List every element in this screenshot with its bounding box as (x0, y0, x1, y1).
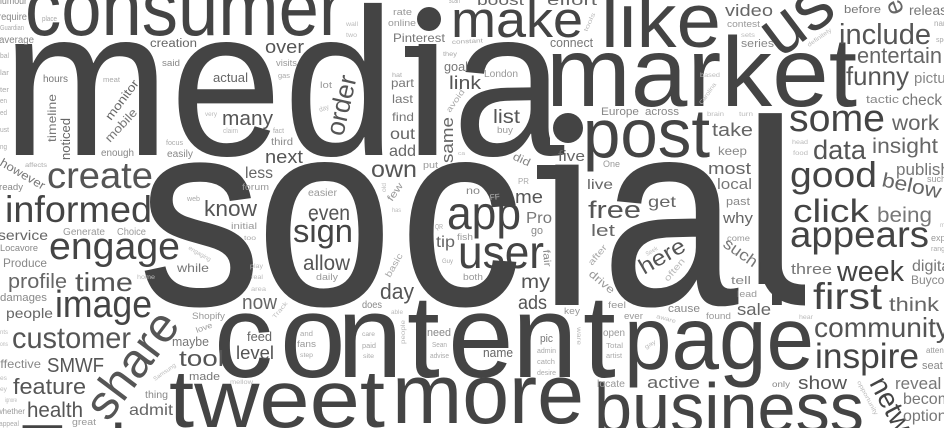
small words: left side: gas (278, 73, 291, 80)
small words: left side: over (265, 37, 304, 57)
words: right side: get (648, 194, 677, 211)
words: right side: click (793, 193, 870, 229)
small words: left side: monitor (102, 77, 142, 123)
words: centre: list (493, 107, 521, 128)
words: centre: few (385, 180, 407, 204)
words: centre: ever (624, 311, 643, 321)
words: right side: video (725, 1, 773, 20)
words: centre: ware (575, 326, 581, 346)
words: right side: reveal (895, 374, 941, 393)
words: centre: Pinterest (393, 31, 446, 45)
words: right side: data (813, 135, 867, 165)
small words: left side: focus (166, 140, 184, 147)
medium words: left side: people (6, 305, 53, 321)
words: right side: why (722, 210, 754, 227)
words: centre: name (483, 345, 513, 360)
words: centre: go (531, 225, 543, 237)
words: centre: drive (586, 268, 617, 297)
words: right side: Seek (645, 246, 660, 258)
small words: left side: en (0, 98, 7, 105)
small words: left side: ey (0, 387, 7, 393)
words: right side: based (700, 73, 720, 79)
small words: left side: ed (0, 110, 7, 117)
words: right side: cause (668, 303, 700, 315)
medium words: left side: customer (12, 322, 131, 355)
words: centre: order (320, 72, 363, 138)
words: centre: sign (293, 213, 353, 249)
small words: left side: actual (213, 70, 248, 85)
words: centre: connect (550, 35, 593, 50)
small words: left side: nts (0, 330, 8, 336)
small words: left side: area (251, 287, 267, 293)
words: centre: ca (458, 151, 465, 157)
word: share: share (74, 300, 190, 428)
round i dots and flags of the two largest words (405, 0, 805, 306)
words: centre: Total (606, 343, 623, 350)
words: right side: first (813, 276, 883, 317)
words: centre: desire (537, 370, 556, 377)
small words: left side: love (195, 320, 214, 335)
words: centre: basic (383, 251, 405, 279)
words: centre: user (458, 226, 544, 278)
words: right side: most (708, 159, 751, 178)
words: centre: artist (606, 353, 622, 360)
words: centre: day (318, 104, 330, 114)
words: centre: paid (362, 343, 376, 350)
small words: left side: fans (297, 339, 317, 349)
words: centre: does (362, 300, 382, 311)
words: right side: show (798, 373, 848, 393)
words: centre: tip (436, 234, 455, 251)
medium words: left side: profile (8, 271, 67, 293)
small words: left side: creation (150, 38, 197, 50)
words: right side: local (717, 176, 752, 193)
words: centre: let (591, 221, 615, 240)
small words: left side: feed (247, 329, 272, 344)
medium words: left side: engage (49, 226, 180, 268)
small words: left side: now (242, 292, 278, 314)
words: right side: definitely (807, 28, 833, 49)
small words: left side: ignore (5, 398, 17, 404)
small words: left side: web (186, 196, 200, 203)
medium words: left side: SMWF (47, 355, 104, 377)
medium words: left side: while (176, 261, 209, 275)
words: centre: catch (537, 359, 555, 366)
words: centre: Pro (526, 210, 552, 227)
small words: left side: great (72, 417, 97, 427)
small words: left side: even (308, 202, 350, 225)
words: centre: after (586, 242, 609, 267)
words: centre: day (380, 279, 414, 304)
small words: left side: lar (0, 70, 10, 77)
words: right side: here (634, 233, 690, 279)
words: centre: free (588, 197, 641, 224)
words: centre: own (371, 156, 417, 182)
small words: left side: place (42, 16, 57, 23)
word: content: content (214, 271, 616, 403)
words: centre: last (392, 92, 414, 106)
words: right side: tell (731, 275, 751, 287)
small words: left side: hours (43, 74, 68, 85)
small words: left side: home (137, 275, 156, 281)
small words: left side: Guardian (0, 25, 24, 32)
words: centre: care (362, 332, 376, 338)
words: right side: being (877, 204, 932, 227)
small words: left side: ng (0, 144, 7, 151)
small words: left side: es (0, 376, 7, 382)
words: right side: include (839, 19, 931, 51)
words: right side: below (880, 169, 944, 203)
words: right side: such (720, 235, 761, 271)
small words: left side: claim (223, 128, 238, 135)
words: right side: found (706, 311, 731, 321)
small words: left side: Produce (3, 256, 47, 270)
words: right side: food (793, 151, 808, 157)
words: right side: brain (707, 112, 724, 118)
medium words: left side: maybe (172, 334, 209, 349)
small words: left side: too (244, 236, 257, 242)
medium words: left side (0, 155, 224, 422)
words: right side: week (836, 256, 904, 288)
medium words: left side: health (27, 399, 83, 422)
words: right side: some (789, 98, 885, 140)
words: right side: sale (737, 300, 771, 319)
small words: left side: and (300, 331, 313, 338)
words: centre: constant (452, 38, 484, 46)
words: right side: appears (790, 214, 929, 255)
words: centre: add (389, 143, 416, 160)
medium words: left side: create (47, 155, 153, 196)
small words: left side: easily (167, 149, 193, 160)
words: centre: people (401, 319, 407, 344)
small words: left side (0, 0, 350, 428)
small words: left side: mobile (102, 105, 140, 145)
words: centre: allow (303, 252, 351, 275)
small words: left side: Locavore (0, 243, 38, 253)
small words: left side: step (300, 353, 314, 359)
small words: left side: next (265, 147, 303, 167)
words: right side: Europe (601, 106, 639, 118)
words: centre: advise (430, 353, 449, 360)
words: right side: seat (922, 360, 943, 372)
words: centre: they (443, 52, 457, 58)
words: centre: One (603, 159, 620, 169)
small words: left side: visits (276, 58, 298, 68)
words: right side: active (647, 373, 700, 392)
words: centre: goal (444, 59, 468, 74)
words: right side: insight (872, 135, 938, 158)
small words: left side: Track (272, 300, 290, 320)
small words: left side: ust (0, 127, 9, 134)
word: page: page (624, 288, 814, 388)
small words: left side: engaging (187, 246, 212, 263)
small words: left side: many (222, 108, 273, 130)
words: right side: aware (655, 314, 677, 325)
words: centre: live (587, 176, 613, 192)
words: right side: only (772, 380, 790, 389)
words: centre: PR (518, 177, 529, 186)
words: right side: series (741, 38, 775, 50)
words: right side: gay (644, 340, 657, 351)
words: centre: put (423, 160, 439, 170)
words: centre: feel (608, 300, 626, 310)
words: centre: app (447, 187, 521, 239)
small words: left side: meat (103, 77, 120, 84)
words: right side: come (727, 234, 751, 243)
words: right side: Carolina (699, 82, 718, 106)
words: right side (601, 0, 944, 425)
words: centre: has (392, 208, 401, 214)
words: centre: ads (518, 293, 547, 314)
medium words: left side: made (189, 371, 220, 383)
words: centre: buy (497, 125, 514, 135)
words: centre: open (603, 328, 625, 339)
words: centre: fish (457, 232, 473, 242)
small words: left side: Samsung (153, 363, 177, 383)
words: centre: able (391, 310, 404, 316)
small words: left side: ter (0, 87, 10, 94)
small words: left side: said (162, 58, 180, 68)
small words: left side: Choice (117, 227, 146, 238)
words: centre: hat (392, 73, 402, 79)
words: centre: same (438, 117, 457, 163)
words: right side: good (790, 154, 877, 195)
words: right side: head (792, 140, 808, 146)
words: centre: Guy (442, 259, 453, 265)
small words: left side: easier (308, 188, 338, 199)
words: centre: link (449, 73, 482, 93)
words: centre: admin (537, 348, 556, 355)
small words: left side: third (271, 137, 293, 148)
small words: left side: average (0, 35, 34, 46)
words: right side: tactic (866, 94, 900, 106)
small words: left side: affects (25, 162, 48, 169)
word: post: post (583, 95, 710, 172)
small words: left side: mellow (230, 380, 254, 386)
small words: left side: noticed (58, 118, 73, 160)
words: right side: turn (739, 112, 753, 118)
medium words: left side: informed (5, 189, 152, 230)
medium words: left side: tool (179, 346, 224, 371)
small words: left side: thing (145, 390, 168, 401)
small words: left side: forum (242, 182, 269, 192)
words: right side: often (662, 256, 687, 283)
words: centre: two (346, 33, 358, 39)
small words: left side: less (245, 165, 273, 182)
words: centre: key (564, 306, 581, 316)
words: centre: both (463, 272, 483, 282)
words: centre: locate (597, 379, 625, 390)
words: centre: out (390, 126, 416, 143)
words: right side: across (645, 106, 680, 118)
words: centre: rate (393, 7, 412, 17)
words: right side: three (791, 261, 832, 278)
words: right side: think (889, 295, 940, 316)
words: centre: FF (489, 192, 500, 202)
medium words: left side: admit (129, 402, 174, 419)
words: centre: need (427, 327, 451, 339)
words: right side: opportunity (855, 380, 878, 416)
small words: left side: bal (0, 53, 9, 60)
words: right side: check (902, 92, 943, 109)
small words: left side: damages (0, 292, 48, 304)
words: right side: work (891, 112, 940, 135)
small words: left side: enough (101, 147, 134, 159)
words: right side: entertain (857, 43, 942, 68)
words: centre: my (521, 272, 551, 293)
words: right side: funny (846, 61, 909, 91)
words: centre: site (363, 354, 375, 360)
word: social: social (139, 67, 797, 360)
words: centre: Sean (432, 342, 447, 349)
small words: left side: very (205, 112, 217, 118)
small words: left side: initial (231, 221, 257, 231)
words: centre (293, 0, 643, 390)
small words: left side: fact (273, 128, 284, 135)
words: centre: London (484, 69, 518, 80)
medium words: left side: image (55, 284, 152, 326)
words: right side: lead (737, 289, 757, 299)
words: right side: hear (799, 315, 813, 321)
small words: left side: real (251, 275, 263, 281)
words: centre: find (392, 110, 414, 124)
words: centre: no (466, 186, 481, 197)
medium words: left side: time (75, 267, 133, 297)
small words: left side: know (204, 196, 257, 221)
words: right side: keep (718, 144, 747, 158)
words: centre: daily (316, 272, 339, 282)
words: right side: before (844, 4, 881, 16)
medium words: left side: feature (13, 374, 86, 399)
words: centre: part (391, 76, 415, 90)
words: right side: inspire (815, 337, 919, 376)
words: centre: wall (345, 22, 358, 28)
small words: left side: timeline (45, 94, 59, 142)
words: right side: sets (741, 33, 755, 39)
small words: left side: ons (0, 342, 8, 348)
small words: left side: play (250, 264, 263, 270)
small words: left side: level (236, 343, 274, 363)
words: centre: me (515, 187, 543, 207)
words: centre: fair (540, 249, 553, 268)
words: right side: take (712, 120, 753, 140)
words: centre: old (382, 183, 388, 192)
words: centre: did (511, 151, 532, 169)
words: centre: online (388, 18, 416, 28)
words: centre: tools (583, 12, 597, 33)
words: centre: five (558, 148, 585, 165)
small words: left side: Generate (63, 227, 105, 238)
words: centre: QR (435, 224, 443, 231)
words: right side: contest (727, 19, 761, 29)
small words: left side: Shopify (192, 311, 226, 321)
word: market: market (546, 17, 857, 127)
words: centre: lot (320, 80, 333, 90)
words: centre: avoid (444, 88, 467, 114)
words: right side: past (726, 196, 750, 208)
words: centre: pic (540, 333, 553, 345)
